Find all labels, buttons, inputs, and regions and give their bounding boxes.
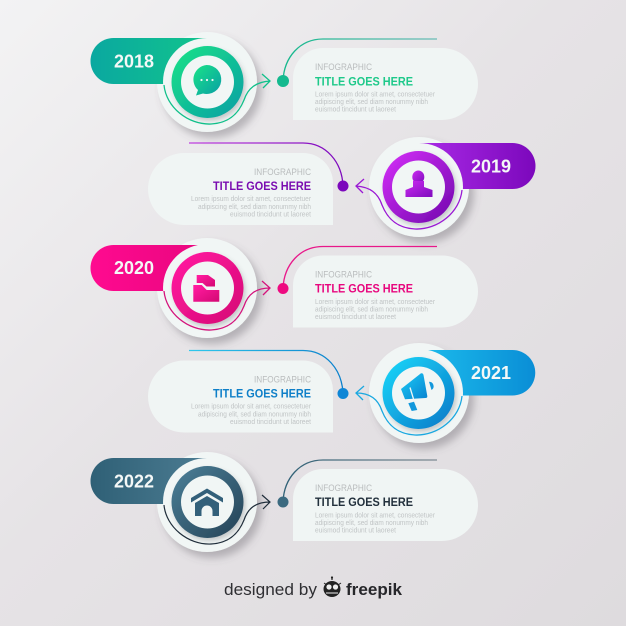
label: INFOGRAPHIC xyxy=(254,374,311,386)
connector line xyxy=(283,460,437,502)
curved arrow xyxy=(356,386,462,435)
heading: TITLE GOES HERE xyxy=(315,495,413,509)
badge 2021 xyxy=(356,343,535,443)
step 2021 xyxy=(148,343,535,443)
curved arrow xyxy=(356,179,462,229)
text card 2022 xyxy=(278,460,478,541)
year pill xyxy=(90,245,207,291)
label: INFOGRAPHIC xyxy=(315,62,372,73)
badge 2019 xyxy=(356,137,536,237)
body text xyxy=(315,92,436,114)
text card 2018 xyxy=(277,39,478,120)
year label: 2021 xyxy=(471,363,511,383)
heading: TITLE GOES HERE xyxy=(315,282,413,296)
label: INFOGRAPHIC xyxy=(254,167,311,178)
connector dot xyxy=(278,283,288,294)
inner disc xyxy=(163,38,251,126)
year label: 2018 xyxy=(114,52,154,72)
badge 2018 xyxy=(90,32,270,132)
body text: euismod tincidunt ut laoreet xyxy=(230,212,311,218)
ring xyxy=(382,151,454,223)
body text: euismod tincidunt ut laoreet xyxy=(315,528,396,534)
ring xyxy=(172,466,244,538)
heading: TITLE GOES HERE xyxy=(213,179,311,193)
connector line xyxy=(189,350,343,394)
body text: Lorem ipsum dolor sit amet, consectetuer xyxy=(315,92,436,98)
label: INFOGRAPHIC xyxy=(315,483,372,494)
outer disc xyxy=(369,137,469,237)
designed by text: designed by xyxy=(224,581,318,599)
connector dot xyxy=(338,180,348,192)
body text: euismod tincidunt ut laoreet xyxy=(315,314,396,321)
inner disc xyxy=(375,143,463,231)
connector dot xyxy=(277,75,289,87)
label: INFOGRAPHIC xyxy=(315,270,372,280)
body text xyxy=(315,299,436,321)
icon: folder xyxy=(193,275,219,302)
text card 2019 xyxy=(148,143,348,225)
outer disc xyxy=(157,238,257,338)
year pill xyxy=(90,458,207,504)
connector line xyxy=(189,143,343,186)
text card 2021 xyxy=(148,350,348,432)
body text: adipiscing elit, sed diam nonummy nibh xyxy=(315,306,428,314)
year label: 2020 xyxy=(114,258,154,278)
icon: freepik bee xyxy=(324,576,341,597)
ring center xyxy=(181,56,234,108)
ring xyxy=(172,252,244,324)
icon: house xyxy=(191,488,223,516)
body text xyxy=(315,512,436,534)
body text: euismod tincidunt ut laoreet xyxy=(315,106,396,114)
inner disc xyxy=(163,244,251,332)
connector dot xyxy=(278,496,288,508)
ring xyxy=(172,46,244,118)
body text: adipiscing elit, sed diam nonummy nibh xyxy=(315,99,428,106)
step 2019 xyxy=(148,137,536,237)
body text: euismod tincidunt ut laoreet xyxy=(230,419,311,426)
ring center xyxy=(181,476,234,528)
body text: Lorem ipsum dolor sit amet, consectetuer xyxy=(191,404,312,410)
body text: Lorem ipsum dolor sit amet, consectetuer xyxy=(315,299,436,306)
inner disc xyxy=(163,458,251,546)
heading: TITLE GOES HERE xyxy=(315,74,413,88)
ring center xyxy=(181,262,234,314)
card shape xyxy=(148,360,333,432)
badge 2020 xyxy=(90,238,270,338)
body text: adipiscing elit, sed diam nonummy nibh xyxy=(198,412,311,418)
outer disc xyxy=(157,452,257,552)
year label: 2019 xyxy=(471,156,511,176)
connector line xyxy=(283,246,437,288)
ring center xyxy=(392,160,445,214)
curved arrow xyxy=(164,495,270,544)
badge 2022 xyxy=(90,452,270,552)
body text: adipiscing elit, sed diam nonummy nibh xyxy=(315,520,428,527)
heading: TITLE GOES HERE xyxy=(213,386,311,400)
connector dot xyxy=(338,388,348,399)
body text xyxy=(191,404,312,426)
curved arrow xyxy=(164,74,270,124)
body text xyxy=(191,196,312,218)
text card 2020 xyxy=(278,246,478,328)
ring center xyxy=(392,366,445,420)
card shape xyxy=(293,469,478,541)
step 2020 xyxy=(90,238,478,338)
step 2018 xyxy=(90,32,478,132)
year pill xyxy=(419,143,536,189)
body text: Lorem ipsum dolor sit amet, consectetuer xyxy=(315,512,436,520)
connector line xyxy=(283,39,437,81)
curved arrow xyxy=(164,281,270,330)
ring xyxy=(382,357,454,429)
outer disc xyxy=(369,343,469,443)
body text: Lorem ipsum dolor sit amet, consectetuer xyxy=(191,196,312,203)
card shape xyxy=(293,48,478,120)
icon: user xyxy=(406,170,432,197)
card shape xyxy=(293,256,478,328)
body text: adipiscing elit, sed diam nonummy nibh xyxy=(198,204,311,211)
footer credit xyxy=(224,576,403,599)
year label: 2022 xyxy=(114,472,154,492)
icon: chat bubble xyxy=(193,65,221,96)
icon: megaphone xyxy=(401,373,434,411)
card shape xyxy=(148,153,333,225)
inner disc xyxy=(375,349,463,437)
step 2022 xyxy=(90,452,478,552)
year pill xyxy=(419,350,535,396)
outer disc xyxy=(157,32,257,132)
freepik wordmark: freepik xyxy=(346,580,403,599)
year pill xyxy=(90,38,207,84)
